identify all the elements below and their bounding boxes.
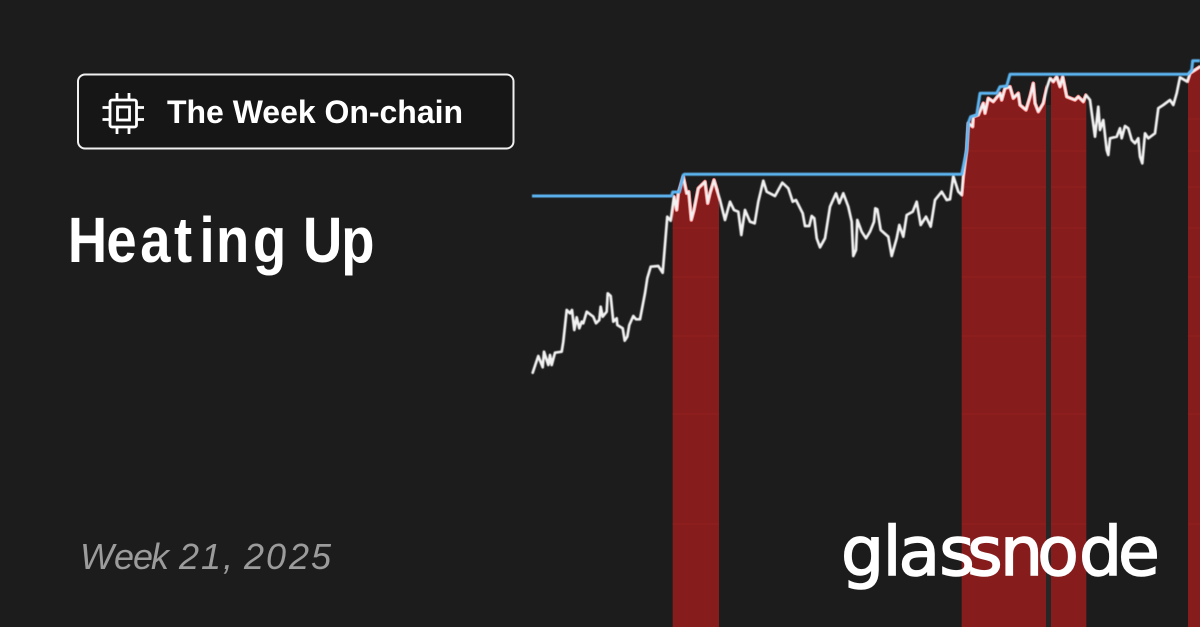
badge label: The Week On-chain <box>167 94 463 130</box>
date: Week 21, 2025 <box>80 536 332 577</box>
price line <box>533 67 1200 373</box>
icon: chip <box>102 93 144 134</box>
title: Heating Up <box>68 204 375 276</box>
red overheated bands <box>672 69 1200 627</box>
all-time-high line <box>532 61 1200 196</box>
badge outline <box>78 74 514 148</box>
logo: glassnode: glassnode <box>841 513 1160 592</box>
red glow under price line <box>671 67 1200 221</box>
badge: The Week On-chain <box>78 74 514 148</box>
chart: price with overheated bands <box>532 0 1200 627</box>
